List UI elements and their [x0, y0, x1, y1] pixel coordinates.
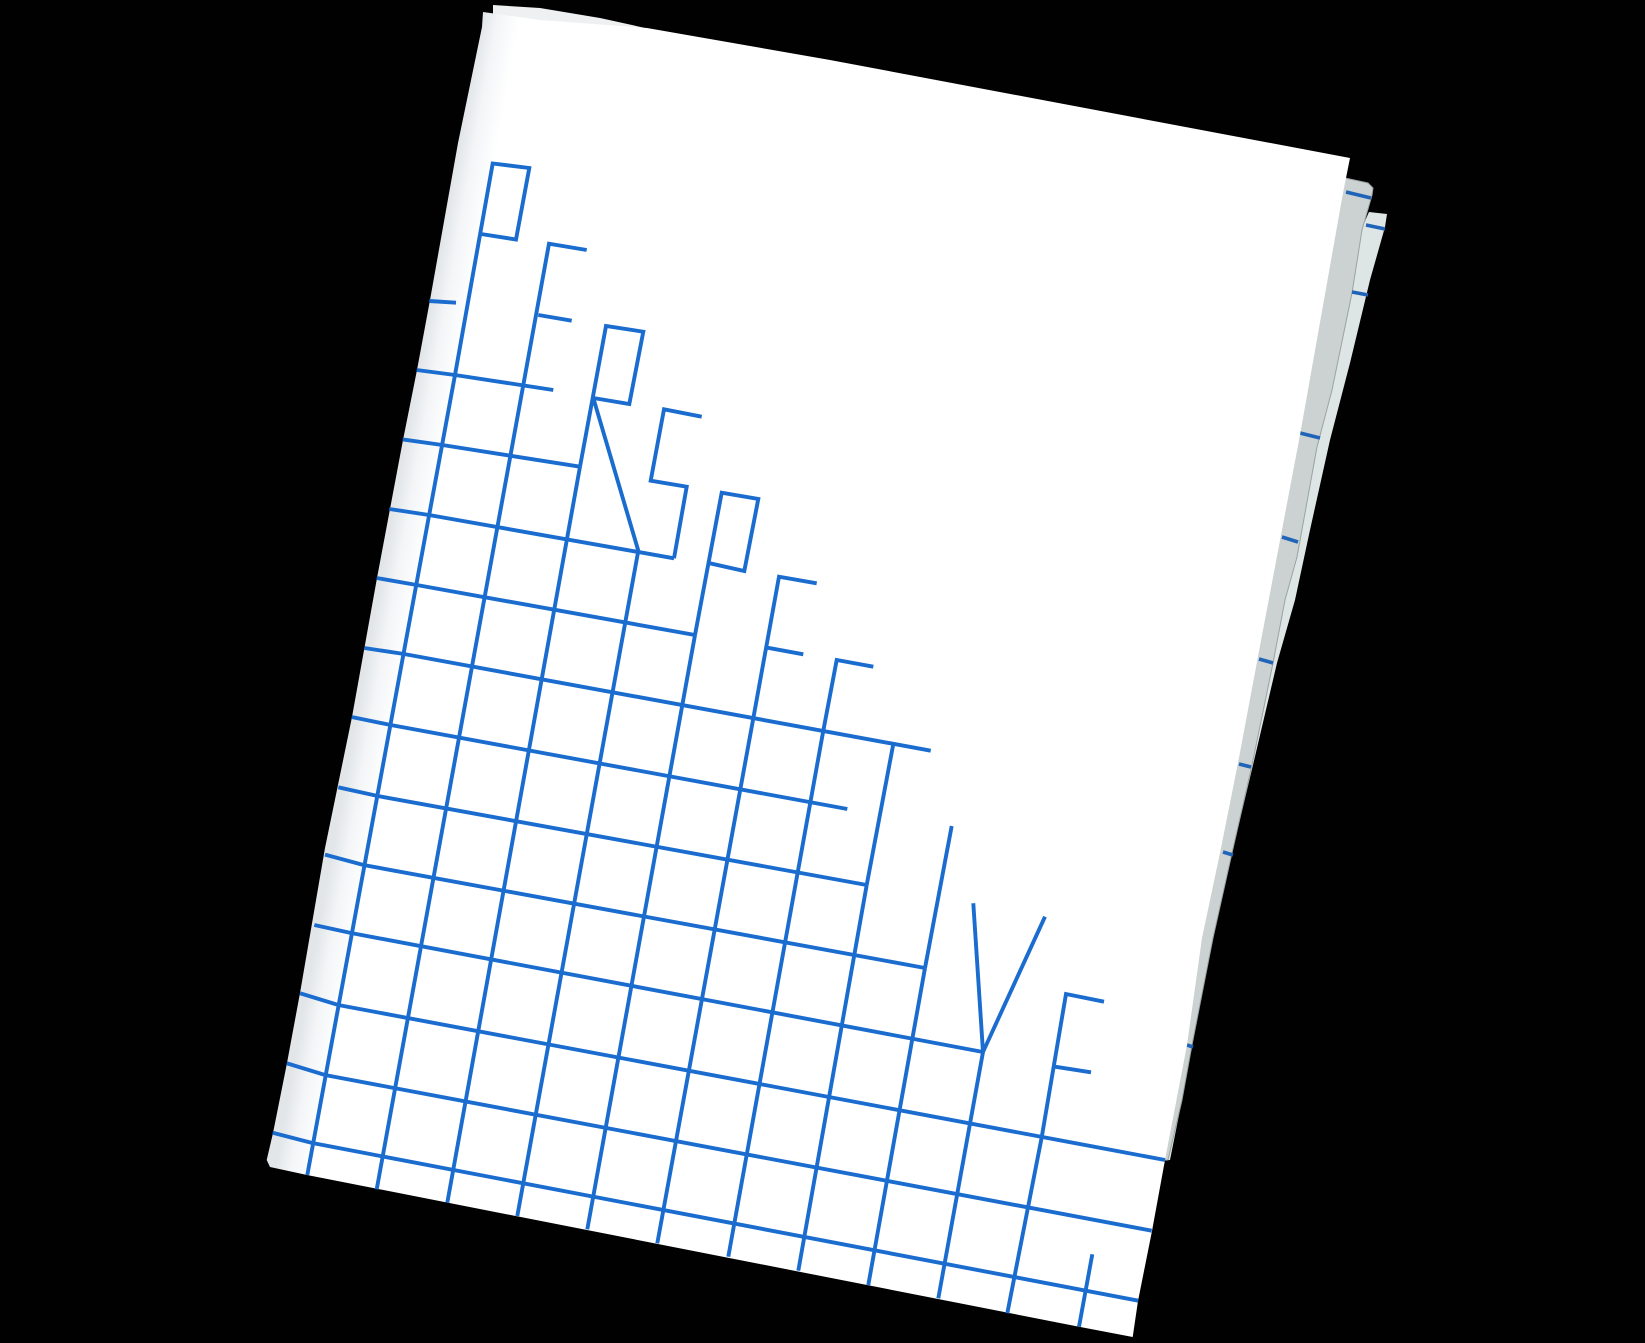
middle page edge: [1150, 178, 1373, 1160]
grid of blue lines: [273, 301, 1165, 1327]
letter I: [925, 826, 952, 968]
letter E: [753, 577, 817, 718]
letter P: [695, 493, 758, 635]
back pages: [1150, 178, 1387, 1160]
letter S: [651, 409, 702, 558]
letter C: [823, 660, 873, 731]
rear page edge: [1150, 212, 1387, 1160]
letter V: [973, 903, 1045, 1052]
title lettering: PERSPECTIVE: [455, 164, 1104, 1137]
letter R: [580, 326, 643, 551]
letter T: [867, 744, 893, 885]
letter P: [455, 164, 529, 375]
horizontal grid lines: [273, 301, 1165, 1301]
inner sheet peeking above the top edge: [493, 5, 700, 40]
page edge grid ticks: [1187, 192, 1385, 1047]
letter E: [1042, 994, 1104, 1137]
letter E: [523, 244, 587, 385]
cover sheet: [267, 12, 1350, 1337]
vertical grid lines: [307, 375, 1092, 1327]
